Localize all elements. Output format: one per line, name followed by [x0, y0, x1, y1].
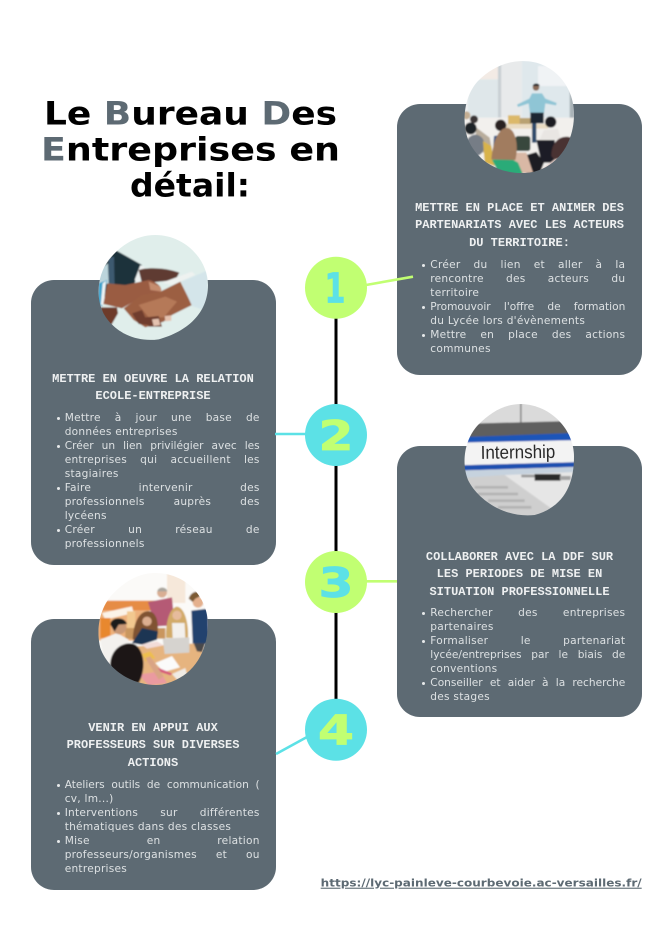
list: relation ecole-entreprise: professionnels	[65, 538, 145, 550]
list: partenariats: territoire	[430, 287, 479, 299]
list: periodes de mise en situation: des stages	[430, 691, 490, 703]
list: relation ecole-entreprise: Mettre à jour une base de	[65, 412, 260, 424]
heading: appui aux professeurs: VENIR EN APPUI AUX	[88, 721, 218, 735]
list: periodes de mise en situation: Conseiller et aider à la recherche	[430, 677, 625, 689]
title: Le Bureau Des	[44, 94, 337, 132]
list: periodes de mise en situation: Rechercher des entreprises	[430, 607, 625, 619]
list: relation ecole-entreprise: Faire intervenir des	[65, 482, 260, 494]
heading: partenariats	[415, 201, 624, 250]
list: relation ecole-entreprise	[57, 412, 260, 550]
step 2: 2	[318, 412, 354, 460]
photo: internship folder	[464, 404, 574, 516]
heading: periodes de mise en situation: LES PERIODES DE MISE EN	[437, 567, 602, 581]
heading: periodes de mise en situation: COLLABORER AVEC LA DDF SUR	[426, 550, 613, 564]
heading: periodes de mise en situation	[426, 550, 613, 599]
photo: internship folder: Internship	[481, 441, 555, 463]
list: periodes de mise en situation: partenaires	[430, 621, 494, 633]
title: Entreprises en	[41, 131, 340, 169]
list: partenariats	[422, 259, 625, 355]
list: relation ecole-entreprise: entreprises qui accueillent les	[65, 454, 260, 466]
heading: periodes de mise en situation: SITUATION PROFESSIONNELLE	[429, 585, 610, 599]
list: relation ecole-entreprise: Créer un lien privilégier avec les	[65, 440, 260, 452]
list: appui aux professeurs: cv, lm...)	[65, 793, 114, 805]
photo: handshake	[98, 235, 208, 340]
connector 1	[366, 277, 413, 285]
website link: https://lyc-painleve-courbevoie.ac-versailles.fr/	[321, 877, 643, 890]
connector 2	[275, 433, 306, 435]
connector 4	[276, 737, 307, 754]
step 1: 1	[324, 264, 346, 312]
heading: relation ecole-entreprise: ECOLE-ENTREPRISE	[95, 389, 211, 403]
panel: appui aux professeurs (4)	[30, 619, 276, 890]
list: appui aux professeurs: entreprises	[65, 863, 127, 875]
panel: relation ecole-entreprise (2)	[30, 280, 276, 565]
heading: appui aux professeurs: PROFESSEURS SUR DIVERSES	[67, 738, 239, 752]
heading: relation ecole-entreprise	[52, 372, 254, 403]
step 4	[305, 699, 367, 761]
photo: presentation to an audience	[464, 61, 574, 173]
photo: students around a table	[98, 574, 208, 685]
list: relation ecole-entreprise: professionnels auprès des	[65, 496, 260, 508]
list: partenariats: communes	[430, 343, 491, 355]
list: relation ecole-entreprise: stagiaires	[65, 468, 119, 480]
step 3: 3	[318, 559, 354, 607]
list: partenariats: Créer du lien et aller à la	[430, 259, 625, 271]
heading: appui aux professeurs: ACTIONS	[128, 756, 178, 770]
connector 3	[366, 580, 397, 583]
list: partenariats: du Lycée lors d'évènements	[430, 315, 585, 327]
step 4: 4	[318, 706, 354, 754]
panel: partenariats (1)	[397, 104, 642, 375]
list: periodes de mise en situation: Formaliser le partenariat	[430, 635, 625, 647]
list: relation ecole-entreprise: données entreprises	[65, 426, 178, 438]
list: appui aux professeurs: thématiques dans des classes	[65, 821, 231, 833]
list: periodes de mise en situation: lycée/entreprises par le biais de	[430, 649, 625, 661]
list: relation ecole-entreprise: lycéens	[65, 510, 107, 522]
list: appui aux professeurs	[57, 779, 260, 875]
list: partenariats: Promouvoir l'offre de formation	[430, 301, 625, 313]
list: appui aux professeurs: Ateliers outils de communication (	[65, 779, 260, 791]
list: periodes de mise en situation: conventions	[430, 663, 497, 675]
list: appui aux professeurs: professeurs/organismes et ou	[65, 849, 260, 861]
list: partenariats: Mettre en place des actions	[430, 329, 625, 341]
heading: partenariats: PARTENARIATS AVEC LES ACTEURS	[415, 218, 624, 232]
title	[41, 94, 340, 205]
heading: partenariats: DU TERRITOIRE:	[469, 236, 570, 250]
list: partenariats: rencontre des acteurs du	[430, 273, 625, 285]
title: détail:	[130, 167, 250, 205]
heading: partenariats: METTRE EN PLACE ET ANIMER DES	[415, 201, 624, 215]
list: relation ecole-entreprise: Créer un réseau de	[65, 524, 260, 536]
step 1	[305, 257, 367, 319]
list: appui aux professeurs: Mise en relation	[65, 835, 260, 847]
list: appui aux professeurs: Interventions sur différentes	[65, 807, 260, 819]
panel: periodes de mise en situation (3)	[397, 446, 642, 717]
heading: appui aux professeurs	[67, 721, 240, 770]
step 3	[305, 551, 367, 613]
step 2	[305, 404, 367, 466]
heading: relation ecole-entreprise: METTRE EN OEUVRE LA RELATION	[52, 372, 254, 386]
list: periodes de mise en situation	[422, 607, 625, 703]
